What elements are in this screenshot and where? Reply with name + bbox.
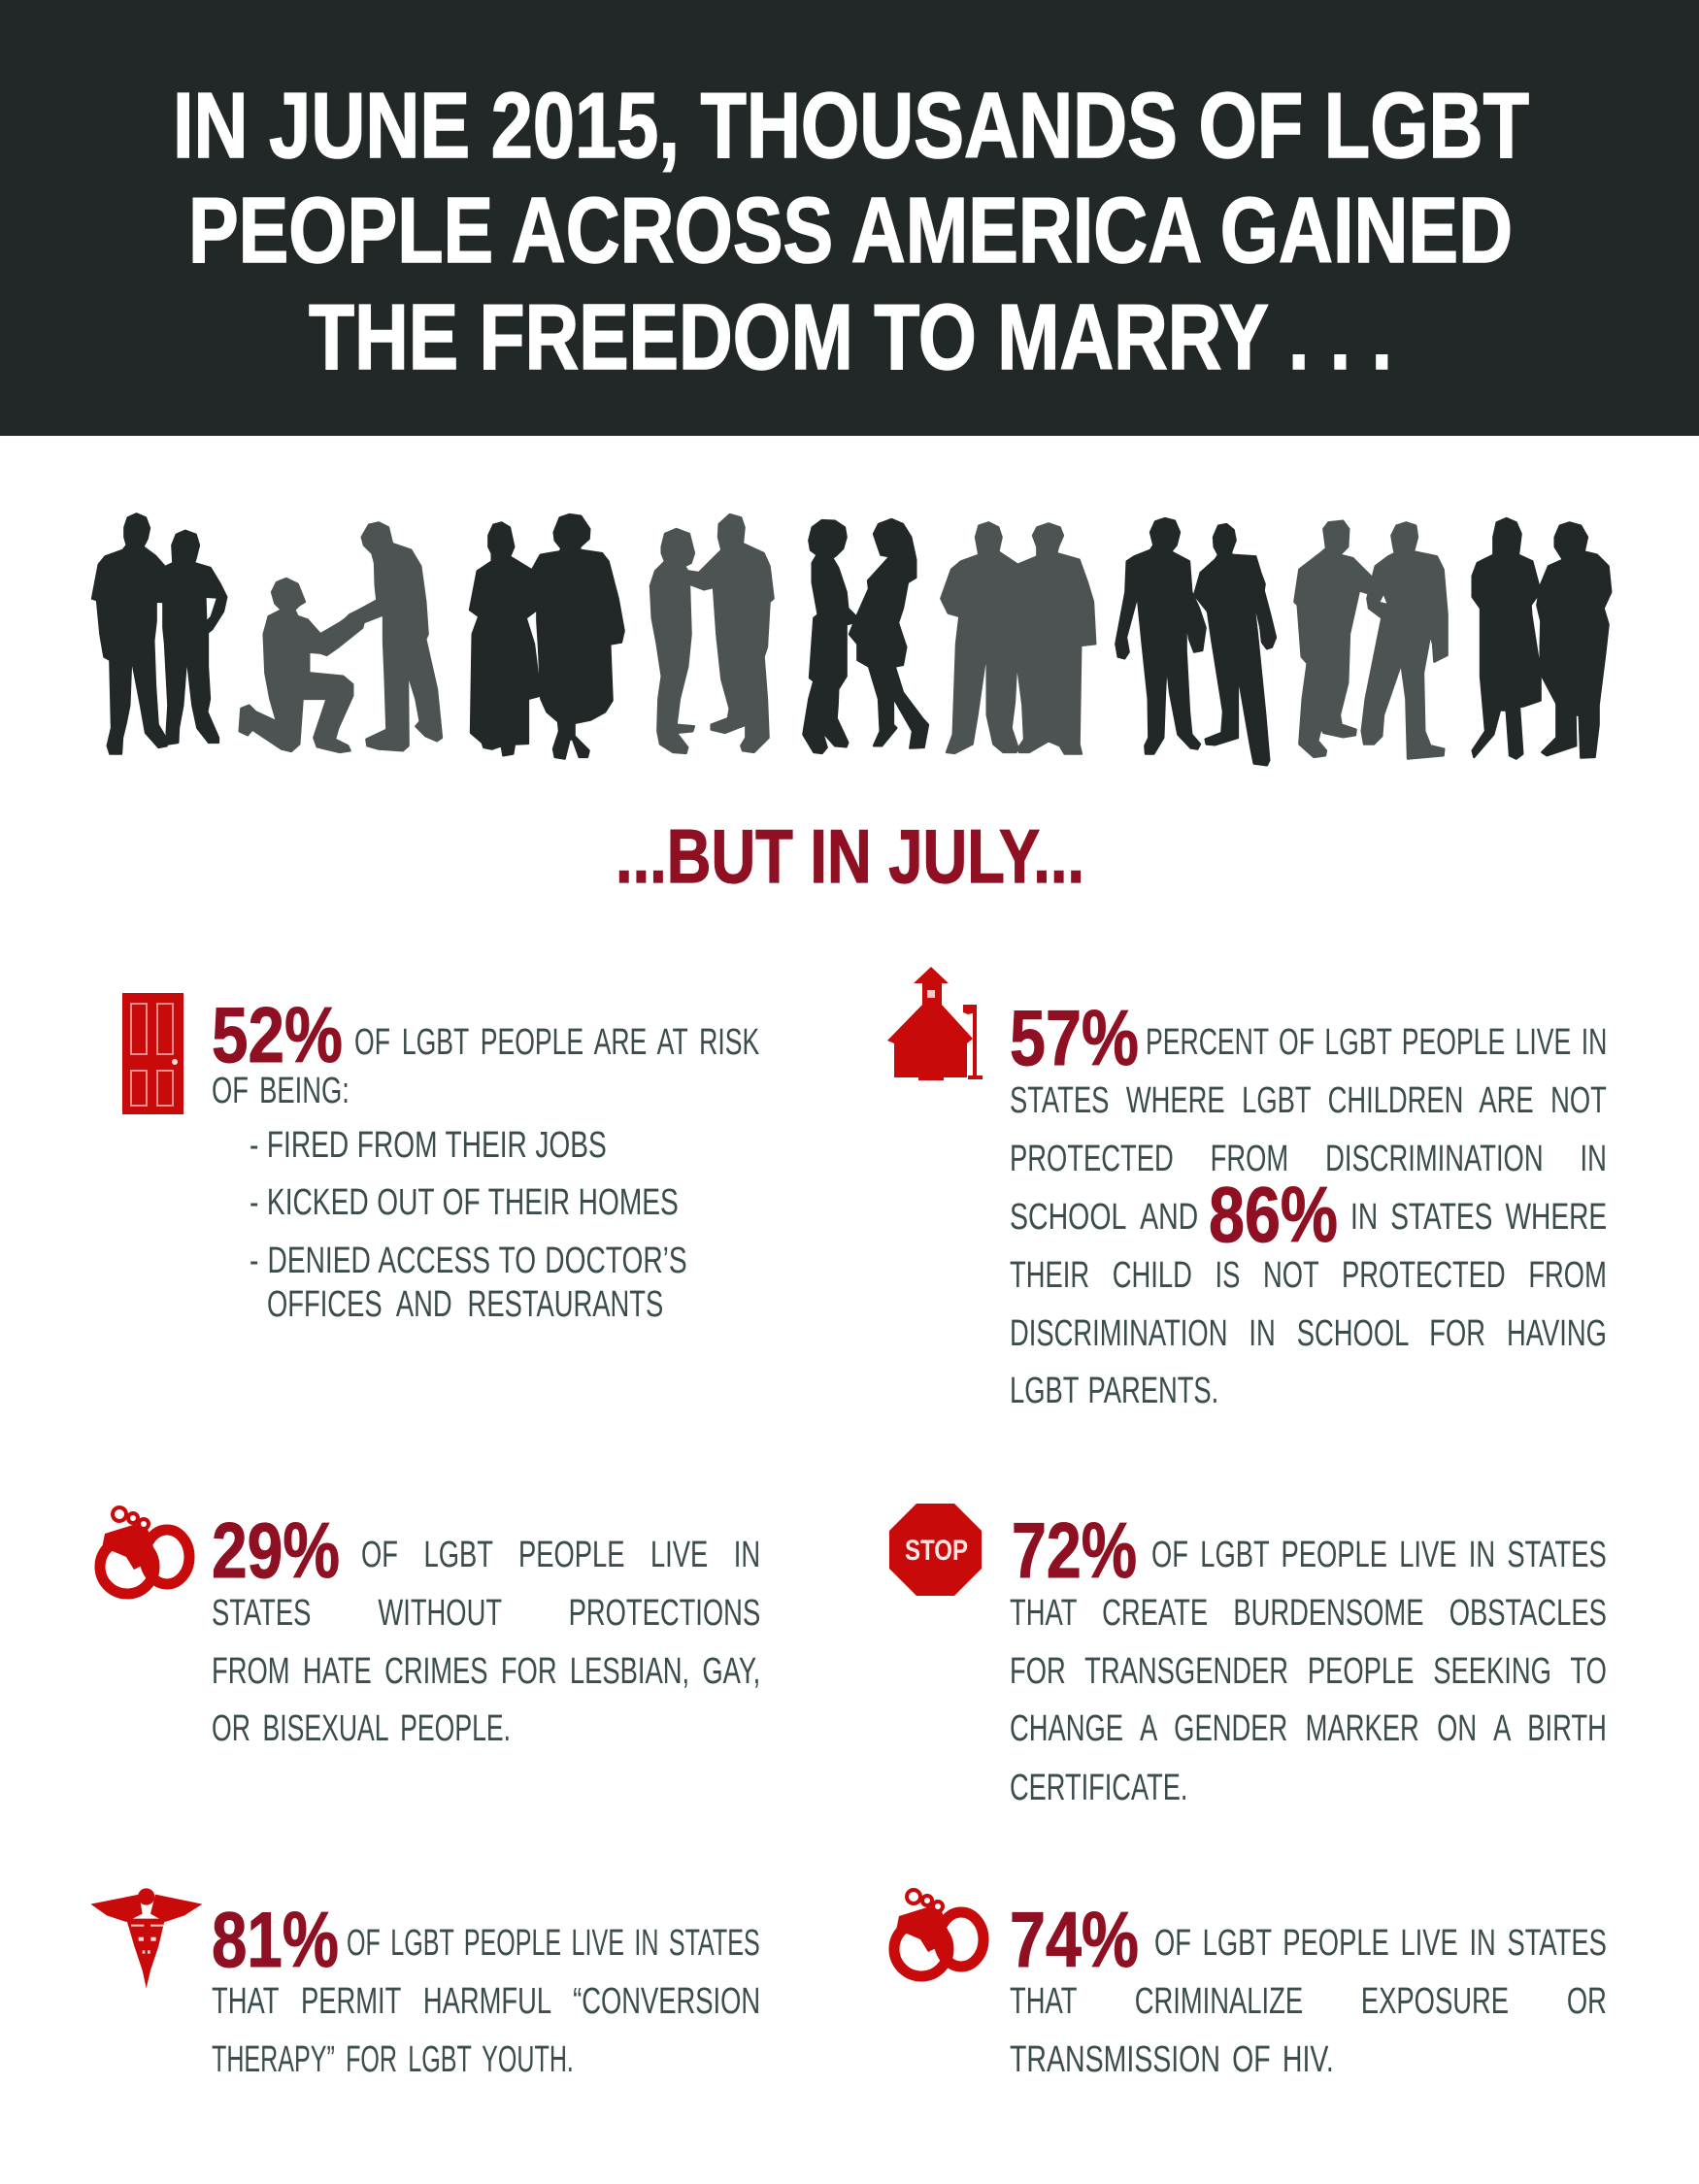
couple 8 [1294, 521, 1448, 759]
stat: 52%: 52% [212, 992, 343, 1079]
text: hate crimes description: STATES WITHOUT PROTECTIONS [212, 1593, 760, 1634]
text: HIV description: OF LGBT PEOPLE LIVE IN STATES [1154, 1923, 1607, 1964]
text: 52% description: OF BEING: [212, 1071, 350, 1111]
text: 52% description: - KICKED OUT OF THEIR HOMES [250, 1182, 679, 1223]
couple 9 [1473, 518, 1611, 759]
text: school description: LGBT PARENTS. [1010, 1371, 1218, 1411]
text: school description: SCHOOL AND [1010, 1197, 1198, 1238]
couple 3 [470, 514, 624, 759]
text: hate crimes description: FROM HATE CRIMES FOR LESBIAN, GAY, [212, 1651, 760, 1692]
text: 52% description: - FIRED FROM THEIR JOBS [250, 1125, 607, 1166]
text: conversion therapy description: OF LGBT PEOPLE LIVE IN STATES [347, 1923, 760, 1964]
text: school description: PERCENT OF LGBT PEOPLE LIVE IN [1146, 1022, 1607, 1063]
icon: door [122, 993, 183, 1114]
text: school description: PROTECTED FROM DISCRIMINATION IN [1010, 1139, 1607, 1179]
text: school description: STATES WHERE LGBT CHILDREN ARE NOT [1010, 1080, 1607, 1121]
header banner [0, 0, 1699, 436]
text: transgender description: FOR TRANSGENDER PEOPLE SEEKING TO [1010, 1651, 1607, 1692]
stat: 86%: 86% [1209, 1172, 1338, 1259]
text: transgender description [1010, 1535, 1607, 1808]
text: school description: THEIR CHILD IS NOT PROTECTED FROM [1010, 1255, 1607, 1296]
panel: 74% HIV criminalization [889, 1888, 1607, 2080]
text: 52% description [212, 1022, 759, 1325]
title [173, 74, 1529, 389]
text: transgender description: CERTIFICATE. [1010, 1768, 1187, 1808]
text: 52% description: OFFICES AND RESTAURANTS [267, 1284, 663, 1325]
icon: handcuffs [100, 1507, 189, 1594]
couple 2: proposal [240, 522, 442, 752]
text: conversion therapy description: THERAPY” FOR LGBT YOUTH. [212, 2039, 574, 2080]
panel: 57% and 86% school [887, 967, 1607, 1411]
text: conversion therapy description [212, 1923, 760, 2080]
icon: stop sign [889, 1504, 982, 1596]
text: transgender description: THAT CREATE BURDENSOME OBSTACLES [1010, 1593, 1607, 1634]
text: HIV description [1010, 1923, 1607, 2080]
stat: 29%: 29% [212, 1507, 340, 1595]
title: THE FREEDOM TO MARRY . . . [309, 285, 1392, 389]
panel: 81% conversion therapy [90, 1888, 760, 2080]
couple 7 [1116, 518, 1276, 765]
couple 5 [803, 519, 928, 753]
text: school description [1010, 1022, 1607, 1411]
panel: 29% hate crimes [95, 1506, 760, 1749]
panel: 52% at risk [122, 992, 759, 1325]
stat: 81%: 81% [212, 1897, 339, 1984]
text: HIV description: TRANSMISSION OF HIV. [1010, 2039, 1334, 2080]
icon: caduceus [90, 1888, 202, 1988]
couple 1 [92, 513, 226, 754]
couple 4 [650, 514, 774, 753]
panel: 72% transgender [889, 1504, 1607, 1808]
couple 6 [941, 522, 1095, 754]
stat: 74%: 74% [1010, 1897, 1139, 1984]
text: school description: IN STATES WHERE [1350, 1197, 1607, 1238]
text: conversion therapy description: THAT PERMIT HARMFUL “CONVERSION [212, 1981, 760, 2022]
text: hate crimes description: OF LGBT PEOPLE LIVE IN [361, 1535, 760, 1575]
text: 52% description: - DENIED ACCESS TO DOCTOR’S [250, 1241, 687, 1281]
text: school description: DISCRIMINATION IN SCHOOL FOR HAVING [1010, 1313, 1607, 1354]
silhouettes of couples [91, 513, 1612, 767]
text: 52% description: OF LGBT PEOPLE ARE AT RISK [354, 1022, 759, 1063]
text: hate crimes description [212, 1535, 760, 1749]
stat: 72%: 72% [1012, 1507, 1137, 1595]
icon: schoolhouse [887, 967, 983, 1080]
icon: stop sign: STOP [905, 1535, 968, 1567]
text: transgender description: OF LGBT PEOPLE LIVE IN STATES [1151, 1535, 1607, 1575]
text: transgender description: CHANGE A GENDER MARKER ON A BIRTH [1010, 1708, 1607, 1749]
text: hate crimes description: OR BISEXUAL PEOPLE. [212, 1708, 511, 1749]
stat: 57%: 57% [1010, 995, 1139, 1082]
text: HIV description: THAT CRIMINALIZE EXPOSURE OR [1010, 1981, 1607, 2022]
icon: handcuffs [894, 1890, 983, 1976]
